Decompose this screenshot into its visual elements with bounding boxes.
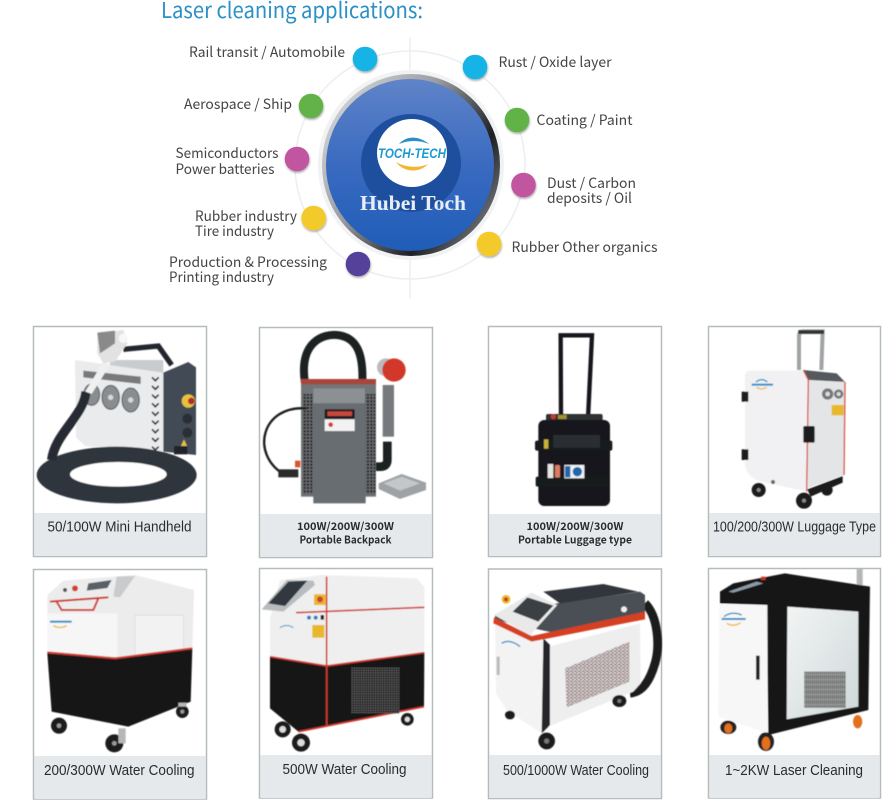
panel: 1~2KW Laser Cleaning: [708, 568, 880, 798]
machine: water cooling 200/300W: [47, 575, 194, 752]
panel: 50/100W Mini Handheld: [34, 326, 206, 556]
application labels: Rubber Other organics: [512, 237, 658, 257]
central disc: TOCH-TECH: [378, 145, 447, 161]
application labels: Printing industry: [169, 267, 275, 287]
machine: water cooling 500W: [262, 575, 424, 752]
central disc: [318, 70, 504, 260]
caption: [518, 519, 632, 548]
caption: Portable Luggage type: [518, 532, 632, 548]
panel: Portable Backpack: [260, 328, 432, 558]
application labels: Coating / Paint: [536, 110, 633, 130]
application labels: Rubber industry: [195, 206, 298, 226]
application labels: Aerospace / Ship: [184, 94, 292, 114]
application labels: Rust / Oxide layer: [498, 52, 612, 72]
diagram: laser cleaning applications: [169, 38, 658, 298]
caption: 500/1000W Water Cooling: [503, 763, 649, 779]
panel: Luggage Type: [708, 326, 880, 556]
application labels: Rail transit / Automobile: [189, 42, 345, 62]
application labels: deposits / Oil: [547, 188, 632, 208]
machine: 1~2KW laser cleaning: [718, 569, 870, 751]
application labels: Tire industry: [195, 221, 275, 241]
caption: [297, 519, 394, 548]
panel: 500/1000W Water Cooling: [488, 569, 662, 798]
machine: mini handheld: [37, 330, 197, 503]
application labels: [169, 42, 658, 287]
caption: Portable Backpack: [300, 532, 392, 548]
application labels: Semiconductors: [176, 143, 279, 163]
central disc: Hubei Toch: [360, 191, 466, 215]
caption: 50/100W Mini Handheld: [48, 520, 192, 536]
application labels: Production & Processing: [169, 252, 327, 272]
panel: Portable Luggage type: [488, 326, 662, 556]
machine: water cooling 500/1000W: [493, 584, 658, 749]
caption: 1~2KW Laser Cleaning: [725, 763, 863, 779]
panel: 500W Water Cooling: [260, 568, 432, 798]
panel: 200/300W Water Cooling: [34, 570, 206, 799]
caption: 200/300W Water Cooling: [44, 763, 194, 779]
orbit ring and axis: [295, 38, 525, 298]
caption: 100W/200W/300W: [526, 519, 624, 534]
application dots: [285, 47, 536, 276]
machine: backpack: [264, 335, 426, 503]
machine: white luggage: [742, 331, 845, 509]
application labels: Power batteries: [176, 159, 275, 179]
machine: black luggage case: [535, 335, 612, 506]
application labels: Dust / Carbon: [547, 173, 636, 193]
caption: 500W Water Cooling: [282, 762, 406, 778]
caption: 100W/200W/300W: [297, 519, 394, 534]
